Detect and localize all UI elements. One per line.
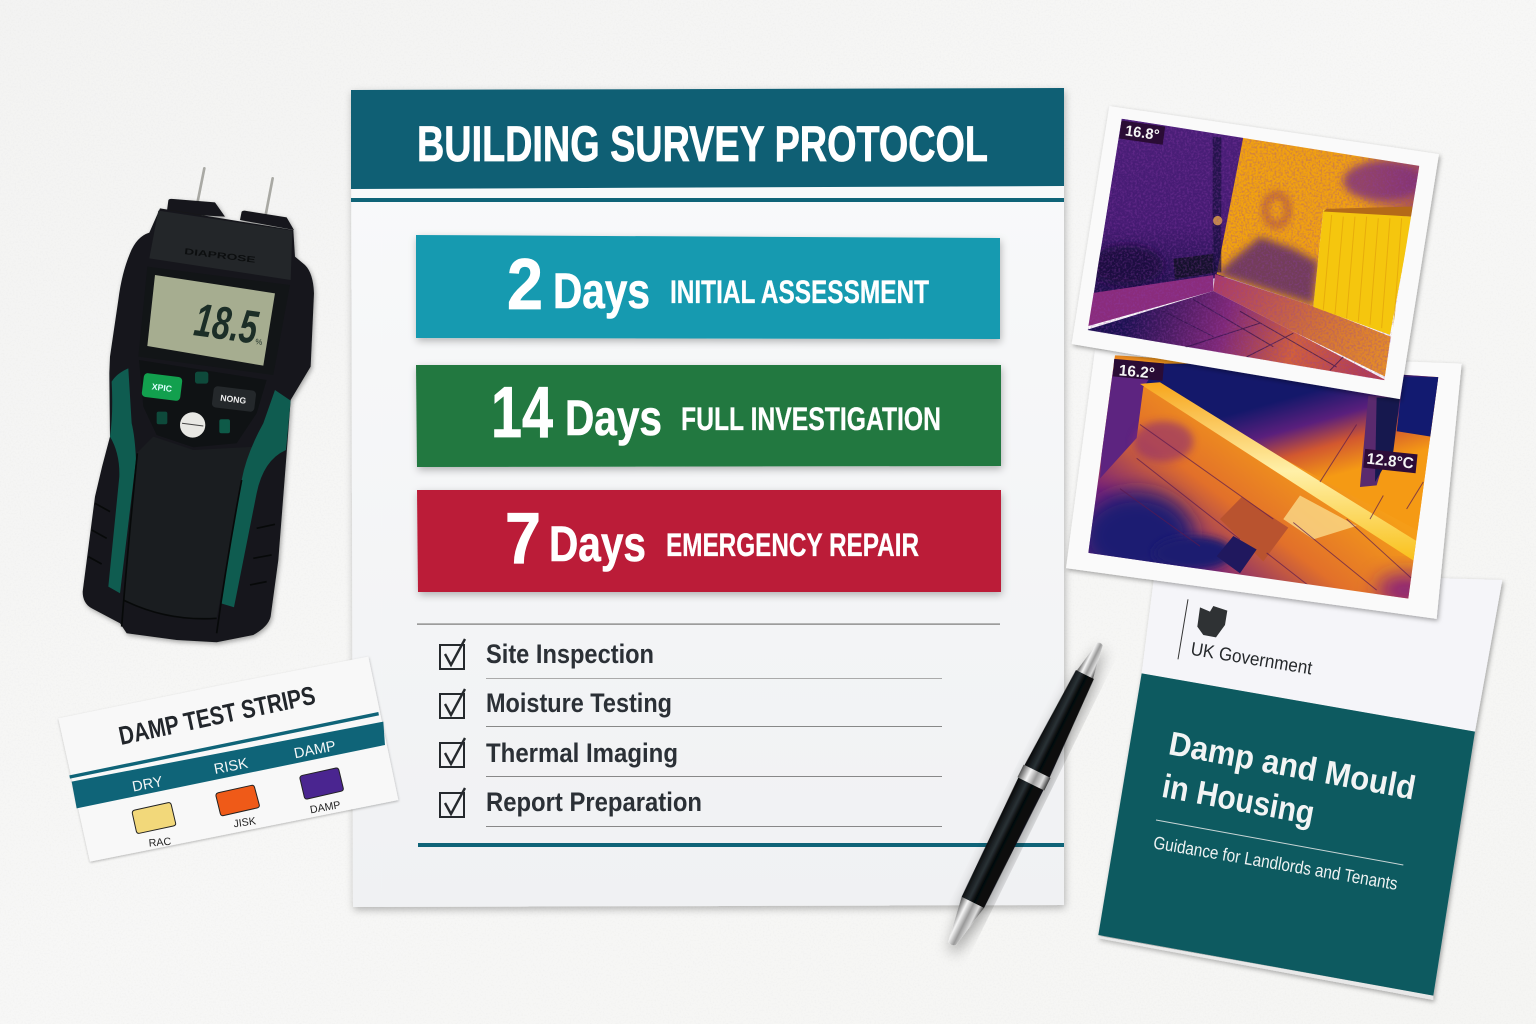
title: BUILDING SURVEY PROTOCOL (417, 116, 988, 172)
screen bezel (138, 267, 290, 375)
item: site inspection: Site Inspection (486, 639, 654, 669)
swatch: damp: DAMP (309, 799, 341, 816)
probe pins (198, 168, 273, 213)
band labels (131, 738, 337, 796)
swatch: dry (132, 803, 176, 850)
button: green: XPIC (151, 381, 173, 394)
panel: protocol document (351, 88, 1064, 907)
moisture meter: DIAPROSE (184, 246, 256, 265)
bar: 14 days full investigation (416, 365, 1001, 467)
swatch: risk (216, 785, 259, 830)
temperature label 16.8 (1119, 120, 1165, 145)
pen (938, 636, 1114, 951)
item: report preparation: Report Preparation (486, 787, 702, 817)
moisture meter (83, 168, 314, 642)
button: dark: NONG (220, 393, 247, 406)
moisture meter: % (255, 337, 263, 347)
button: dark (212, 386, 256, 412)
bar: 7 days emergency repair: Days (549, 516, 646, 572)
subtitle: Guidance for Landlords and Tenants (1152, 833, 1399, 894)
thermal photo: damp corner and radiator (1072, 106, 1439, 399)
header band (351, 88, 1064, 189)
bar: 2 days initial assessment (416, 235, 1000, 339)
bar: 14 days full investigation: FULL INVESTIGATION (681, 401, 941, 437)
crest and divider (1178, 599, 1227, 659)
band labels: RISK (213, 756, 250, 778)
thermal photo: floor and beam (1066, 350, 1462, 619)
head piece (149, 211, 292, 280)
bar: 7 days emergency repair (417, 490, 1001, 592)
bar: 7 days emergency repair: EMERGENCY REPAIR (666, 527, 919, 563)
band labels: DRY (131, 774, 164, 796)
guidance booklet (1098, 570, 1502, 1000)
swatch: risk: JISK (233, 815, 257, 830)
item: moisture testing: Moisture Testing (486, 688, 672, 718)
button panel (139, 360, 267, 447)
item: thermal imaging: Thermal Imaging (486, 738, 678, 768)
bar: 2 days initial assessment: Days (553, 263, 650, 319)
temperature label 16.8: 16.8° (1124, 123, 1160, 144)
guidance booklet: in Housing (1159, 768, 1317, 833)
damp test strips card (58, 657, 398, 862)
checklist (417, 624, 1064, 847)
bar: 2 days initial assessment: 2 (507, 245, 543, 325)
bar: 2 days initial assessment: INITIAL ASSESSMENT (670, 274, 929, 310)
button: round white (180, 412, 205, 438)
book title: Damp and Mould (1166, 725, 1418, 807)
swatch: damp (300, 768, 343, 816)
moisture meter: 18.5 (191, 293, 262, 354)
pen tip (941, 897, 984, 951)
LCD (147, 275, 275, 366)
meter body (83, 208, 314, 642)
pen upper barrel (1025, 668, 1097, 778)
bar: 14 days full investigation: 14 (491, 373, 553, 453)
band labels: DAMP (293, 738, 337, 762)
front panel (123, 437, 257, 619)
swatch: dry: RAC (148, 836, 172, 850)
card heading: DAMP TEST STRIPS (116, 680, 318, 751)
bar: 7 days emergency repair: 7 (505, 499, 541, 579)
green side strips (108, 368, 136, 593)
button: green (141, 373, 183, 401)
temperature label 16.2: 16.2° (1118, 362, 1155, 382)
publisher: UK Government (1189, 638, 1315, 679)
pen lower barrel (960, 778, 1043, 908)
temperature label 16.2 (1113, 359, 1164, 383)
grip ridges (88, 453, 275, 633)
pen clicker (1077, 639, 1109, 678)
temperature label 12.8: 12.8°C (1366, 451, 1414, 473)
bar: 14 days full investigation: Days (565, 390, 662, 446)
pen ring (1017, 765, 1051, 790)
